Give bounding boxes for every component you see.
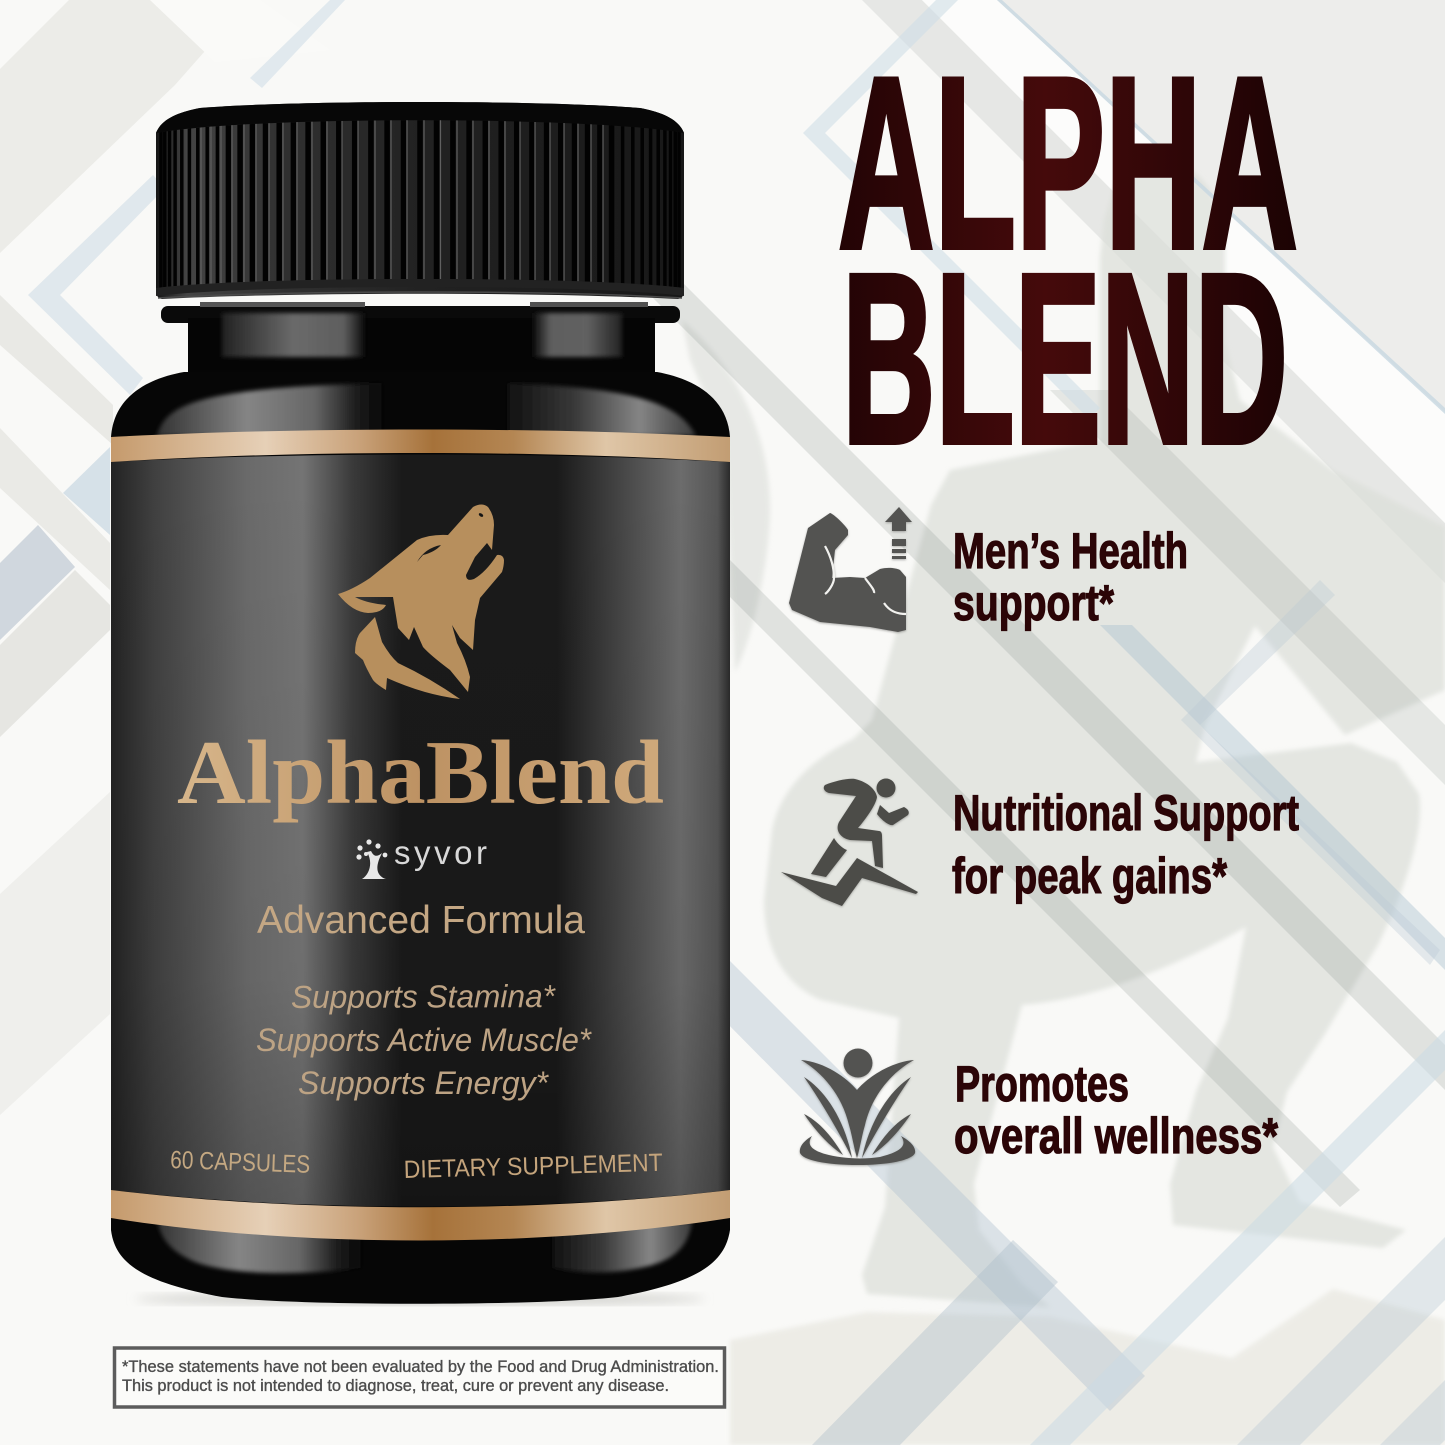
icon: flexed arm with arrow [789,507,912,632]
benefit: mens health: support* [953,575,1114,631]
bottle shadow [135,1293,705,1305]
bottle neck [161,302,680,378]
benefit: mens health: Men’s Health [953,523,1188,579]
benefit: mens health [953,523,1188,631]
top gold band [111,430,730,462]
benefit: overall wellness: Promotes [955,1056,1129,1112]
advanced formula: Advanced Formula [257,899,585,942]
60 capsules: 60 CAPSULES [170,1146,311,1179]
diagonal stripes right [640,470,1360,1207]
label claims: Supports Active Muscle* [256,1022,592,1058]
title [838,26,1298,494]
benefit: nutritional support: for peak gains* [952,848,1227,904]
disclaimer box [114,1348,724,1407]
label claims: Supports Stamina* [291,978,557,1015]
syvor logo: syvor [394,834,487,871]
bottle cap [156,102,684,299]
cap ribs [226,120,614,283]
label claims: Supports Energy* [298,1065,550,1101]
right side light areas [862,0,1445,583]
icon: wellness figure [800,1048,915,1165]
disclaimer box: *These statements have not been evaluated by the Food and Drug Administration. [122,1358,719,1376]
label claims [256,978,592,1101]
plate arc [682,320,770,672]
bottle body [111,372,730,1304]
benefit: overall wellness [954,1056,1278,1164]
disclaimer box: This product is not intended to diagnose, treat, cure or prevent any disease. [122,1377,669,1395]
brand name: AlphaBlend [177,722,664,823]
shoulder highlights [157,383,696,436]
base highlights [157,1218,692,1273]
floor mound [730,1289,1445,1445]
left side bands [0,0,250,253]
dietary supplement: DIETARY SUPPLEMENT [403,1149,663,1184]
syvor logo [356,834,487,879]
wolf logo [338,504,504,699]
bottom gold band [111,1190,730,1240]
benefit: nutritional support: Nutritional Support [953,785,1299,841]
bottle label [111,454,730,1206]
tree icon [356,839,387,879]
product bottle [111,102,730,1304]
athlete silhouette [764,160,1445,1307]
benefit: overall wellness: overall wellness* [954,1108,1278,1164]
benefit: nutritional support [952,785,1299,904]
icon: runner [781,778,918,906]
